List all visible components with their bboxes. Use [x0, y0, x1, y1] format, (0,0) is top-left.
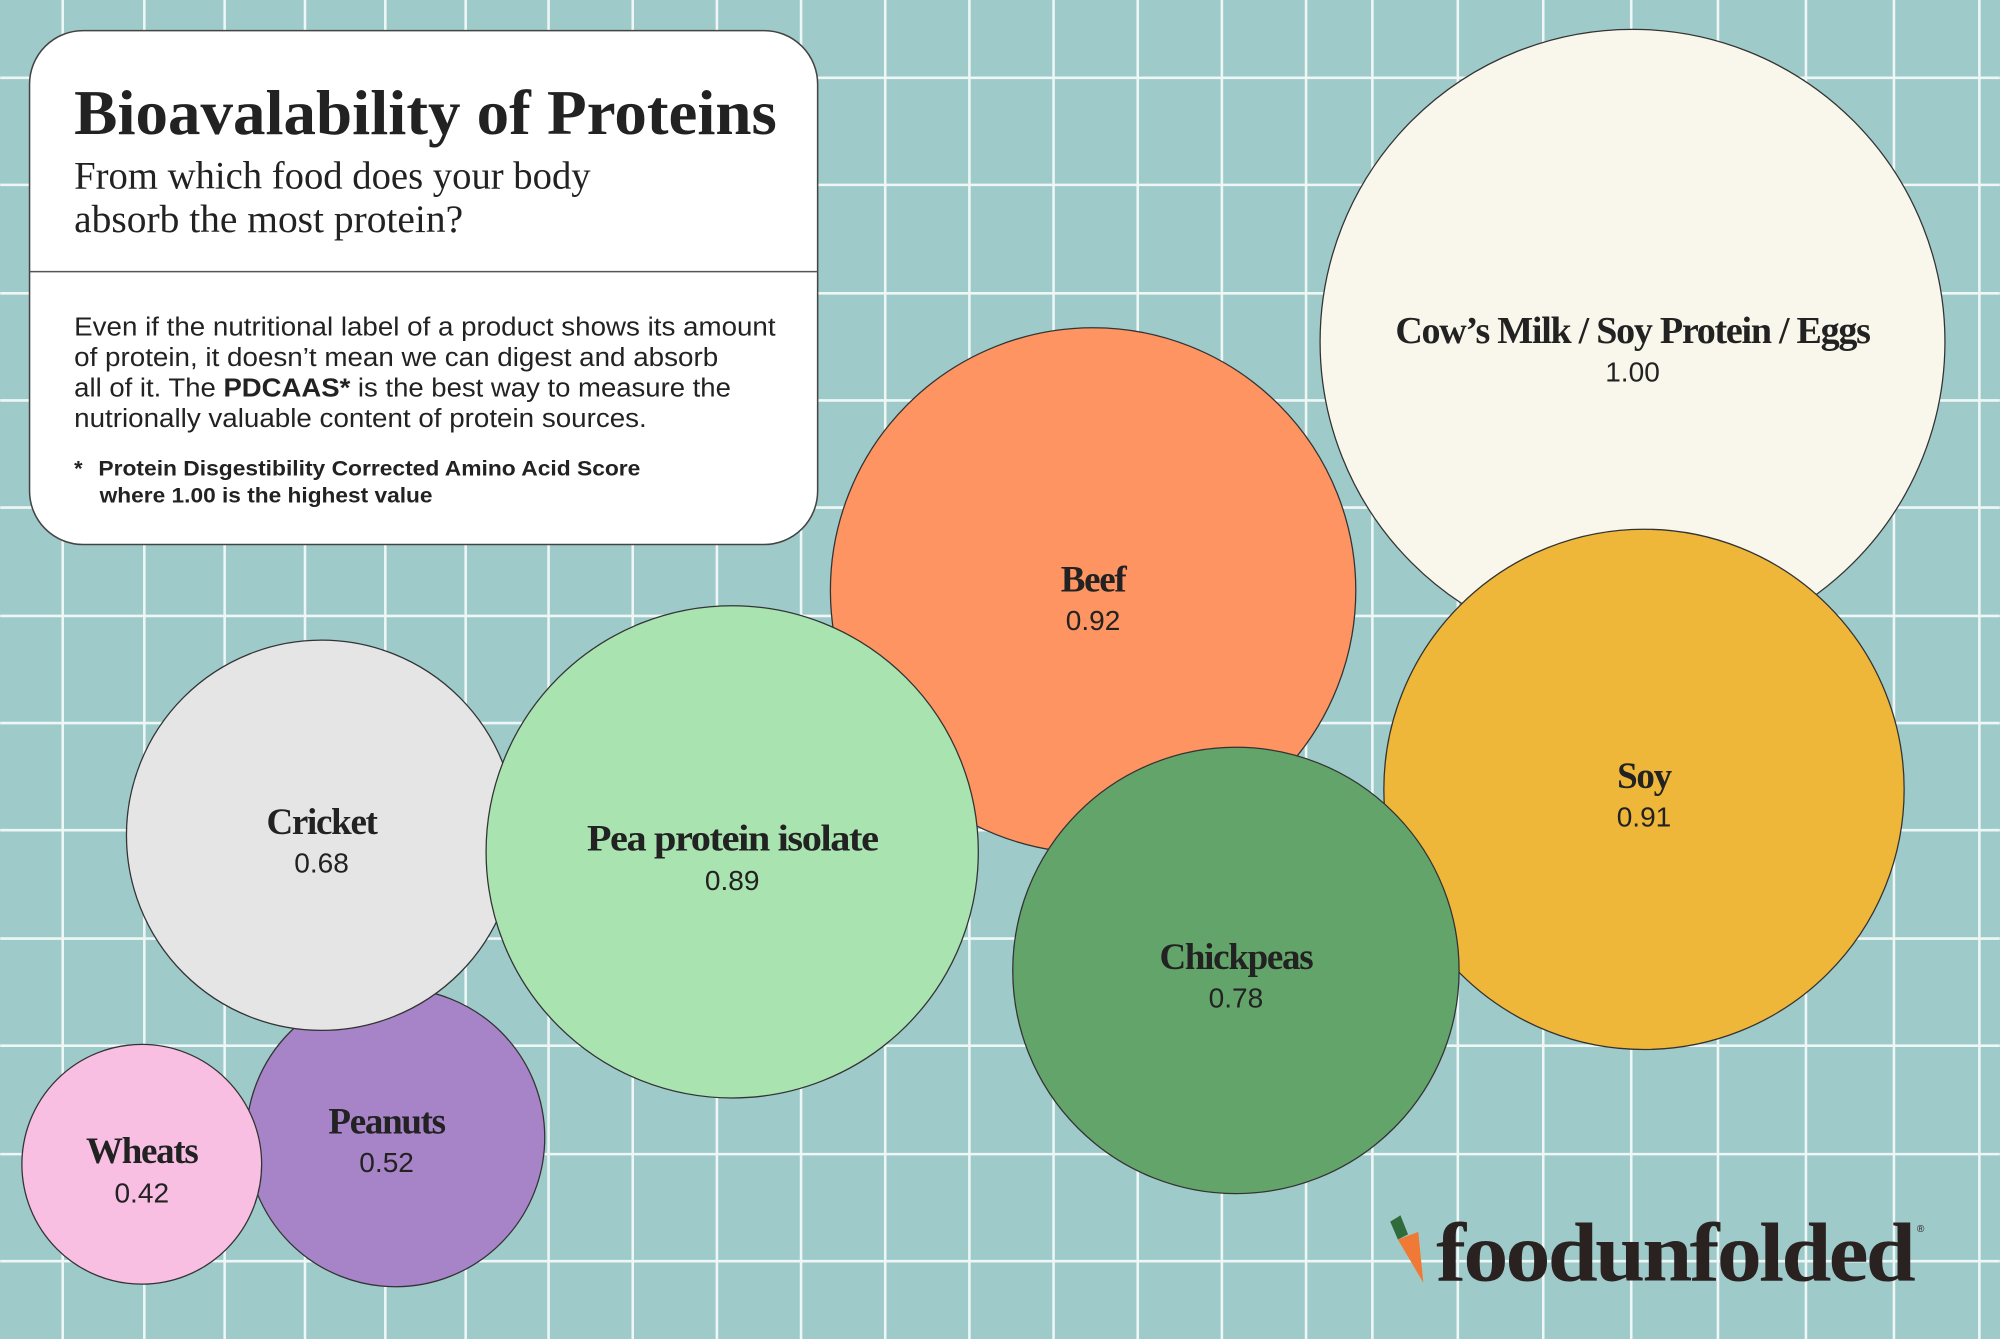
subtitle — [74, 154, 591, 241]
logo: foodunfolded: foodunfolded — [1436, 1206, 1915, 1299]
panel: intro — [30, 31, 818, 545]
subtitle: absorb the most protein? — [74, 197, 463, 241]
bubble: soy: 0.91 — [1617, 801, 1671, 832]
bubble: beef — [830, 328, 1356, 853]
bubble: peanuts: 0.52 — [359, 1147, 414, 1178]
subtitle: From which food does your body — [74, 154, 591, 198]
bubble: beef: Beef — [1061, 559, 1127, 600]
title: Bioavalability of Proteins — [74, 77, 777, 148]
bubble: wheats — [22, 1044, 262, 1284]
bubble: chickpeas — [1013, 747, 1459, 1194]
bubble: cricket: 0.68 — [294, 847, 349, 878]
bubble: cow's milk / soy protein / eggs — [1320, 29, 1945, 654]
body text: all of it. The PDCAAS* is the best way to measure the — [74, 375, 731, 403]
bubble: cricket — [126, 640, 517, 1030]
footnote: * — [74, 456, 83, 481]
bubble: cow's milk / soy protein / eggs: Cow’s Milk / Soy Protein / Eggs — [1395, 310, 1870, 352]
bubble: pea protein isolate — [486, 606, 978, 1098]
bubble: cow's milk / soy protein / eggs: 1.00 — [1605, 356, 1660, 387]
bubble: peanuts: Peanuts — [328, 1101, 446, 1142]
body text: nutrionally valuable content of protein sources. — [74, 405, 647, 433]
bubble: chickpeas: Chickpeas — [1159, 936, 1313, 977]
bubble: cricket: Cricket — [267, 801, 379, 842]
footnote: Protein Disgestibility Corrected Amino Acid Score — [98, 456, 640, 481]
footnote — [74, 456, 640, 507]
bubble: pea protein isolate: Pea protein isolate — [587, 818, 879, 859]
bubble: wheats: 0.42 — [114, 1178, 169, 1209]
bubble: peanuts — [246, 988, 545, 1287]
icon: carrot — [1390, 1215, 1423, 1283]
bubble: soy — [1384, 529, 1904, 1050]
bubble: soy: Soy — [1617, 755, 1673, 796]
bubble: wheats: Wheats — [86, 1130, 198, 1171]
body text — [74, 313, 776, 433]
bubble: chickpeas: 0.78 — [1209, 982, 1263, 1013]
bubble: pea protein isolate: 0.89 — [705, 865, 759, 896]
footnote: where 1.00 is the highest value — [99, 482, 433, 507]
bubble: beef: 0.92 — [1066, 605, 1120, 636]
body text: of protein, it doesn’t mean we can digest and absorb — [74, 344, 718, 372]
logo: foodunfolded: ® — [1917, 1224, 1925, 1235]
body text: Even if the nutritional label of a product shows its amount — [74, 313, 776, 341]
